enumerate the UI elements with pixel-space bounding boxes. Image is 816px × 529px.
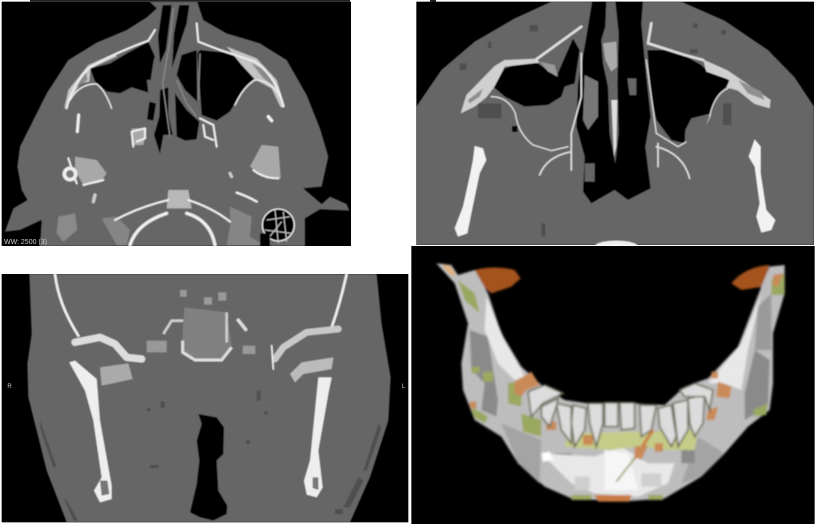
- skull base arc: [594, 240, 638, 245]
- teeth: [528, 383, 713, 447]
- sphenoid body: [182, 307, 232, 361]
- mandible ramus right: [304, 377, 332, 497]
- panel: 3D mandible rendering (bottom right): [411, 246, 815, 524]
- panel: axial CT through maxillary sinuses (top left): [2, 2, 351, 246]
- panel: coronal CT (bottom left): L: [402, 384, 406, 390]
- speckle: [460, 23, 731, 237]
- mandible ramus left: [455, 146, 486, 237]
- articular discs / condyle heads: [100, 363, 133, 386]
- bone outlines: [67, 23, 283, 245]
- septum and turbinates: [583, 42, 636, 182]
- zygomatic bone fill: [461, 59, 540, 113]
- condyle discs: [475, 267, 521, 293]
- left sinus air: [494, 38, 580, 107]
- mandible ramus right: [749, 139, 775, 233]
- side labels: R: [7, 384, 12, 390]
- skull base bone: [55, 274, 347, 369]
- zygomatic bone fill: [64, 53, 117, 109]
- nasal septum and turbinates: [163, 8, 200, 137]
- oropharynx airway: [190, 414, 227, 521]
- bright ramus ridges: [485, 293, 761, 497]
- right sinus air: [647, 50, 730, 143]
- airspace: mastoid cells: [262, 209, 294, 241]
- nasal airway: [576, 2, 651, 203]
- panel: axial CT through maxillary sinuses (top right): [416, 2, 814, 253]
- spinal canal edge: [260, 233, 270, 246]
- green and orange discolouration: [458, 273, 785, 500]
- head soft tissue: [27, 274, 391, 522]
- head soft tissue: [416, 2, 814, 245]
- head soft tissue: [5, 2, 349, 246]
- right sinus air: [197, 50, 254, 121]
- nasal airway: [147, 5, 199, 154]
- left sinus air: [90, 42, 155, 93]
- muscle and fat patches: [57, 128, 281, 245]
- speckle: [40, 391, 382, 521]
- scale label: WW: 2500 (3): [4, 239, 47, 246]
- mental foramen highlight: [541, 452, 553, 462]
- condyle ring left: [64, 168, 76, 180]
- shading: [470, 293, 771, 483]
- bone outlines: [491, 23, 728, 178]
- fracture line: [635, 430, 653, 458]
- mandible ramus left: [69, 361, 112, 502]
- panel: coronal CT (bottom left): [2, 274, 408, 522]
- mandible body: [436, 263, 785, 502]
- cropped caption line at top: [30, 0, 436, 2]
